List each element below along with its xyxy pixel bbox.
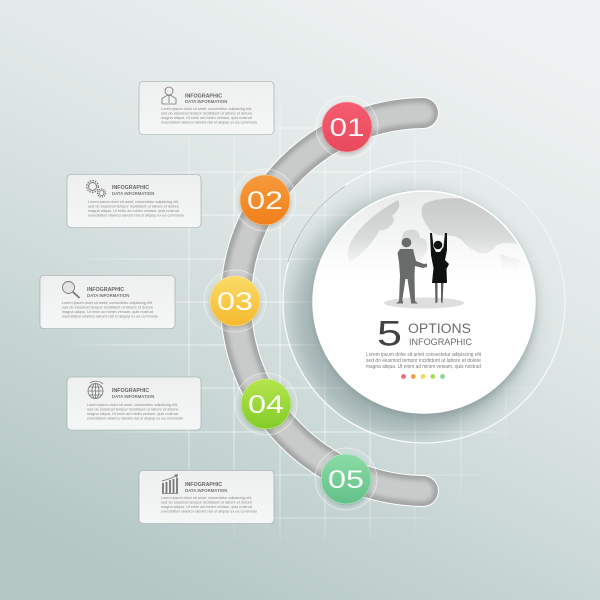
title: OPTIONS <box>408 321 471 336</box>
card 3 text: sed do eiusmod tempor incididunt ut labore et dolore <box>62 304 153 310</box>
card 2 text: magna aliqua. Ut enim ad minim veniam, quis nostrud <box>88 208 179 213</box>
title <box>377 314 472 354</box>
card 1 text: DATA INFORMATION <box>185 99 227 104</box>
card 4 text: magna aliqua. Ut enim ad minim veniam, quis nostrud <box>87 411 178 416</box>
card 5 text: INFOGRAPHIC <box>185 482 222 488</box>
icon: growth chart <box>162 474 178 494</box>
central disc <box>313 191 535 417</box>
panel: card 2 <box>67 174 201 228</box>
card 4 text: INFOGRAPHIC <box>112 388 149 394</box>
badge 04: 04 <box>248 391 284 419</box>
world map <box>348 198 520 262</box>
panel: card 4 <box>67 377 201 430</box>
card 2 text: DATA INFORMATION <box>112 191 154 196</box>
card 3 text <box>62 287 158 318</box>
ground shadow <box>384 298 464 308</box>
badge 02 <box>234 169 296 231</box>
body text: Lorem ipsum dolor sit amet consectetur adipiscing elit <box>366 352 482 358</box>
card 5 text: DATA INFORMATION <box>185 488 227 493</box>
card 4 text: Lorem ipsum dolor sit amet, consectetur adipiscing elit, <box>87 402 178 407</box>
panel: card 5 <box>139 470 274 524</box>
card 1 text <box>161 94 257 124</box>
card 2 text <box>88 185 184 218</box>
icon: magnifier <box>62 282 80 298</box>
badge 04 <box>235 373 297 435</box>
curved track <box>236 113 423 491</box>
card 3 text: exercitation ullamco laboris nisi ut aliquip ex ea commodo <box>62 314 158 318</box>
card 1 text: Lorem ipsum dolor sit amet, consectetur adipiscing elit, <box>161 106 252 111</box>
title: 5 <box>377 314 402 354</box>
body text: magna aliqua. Ut enim ad minim veniam, quis nostrud <box>366 364 481 370</box>
card 5 text <box>161 482 257 514</box>
card 5 text: magna aliqua. Ut enim ad minim veniam, quis nostrud <box>161 504 252 509</box>
card 5 text: sed do eiusmod tempor incididunt ut labore et dolore <box>161 500 252 504</box>
badge 01 <box>316 96 378 158</box>
card 4 text <box>87 388 183 420</box>
card 1 text: exercitation ullamco laboris nisi ut aliquip ex ea commodo <box>161 120 257 124</box>
card 4 text: sed do eiusmod tempor incididunt ut labore et dolore <box>87 406 178 412</box>
icon: globe <box>88 381 103 398</box>
man silhouette <box>396 238 427 304</box>
card 3 text: INFOGRAPHIC <box>87 287 124 293</box>
body text: sed do eiusmod tempor incididunt ut labore et dolore <box>366 358 481 364</box>
panel: card 3 <box>40 276 175 328</box>
card 2 text: INFOGRAPHIC <box>112 185 149 191</box>
card 4 text: DATA INFORMATION <box>112 394 154 399</box>
badge 01: 01 <box>330 114 364 142</box>
color dots <box>401 374 445 379</box>
badge 05 <box>315 448 377 510</box>
card 1 text: INFOGRAPHIC <box>185 94 222 100</box>
badge 02: 02 <box>247 187 283 215</box>
people <box>384 233 464 308</box>
card 3 text: magna aliqua. Ut enim ad minim veniam, quis nostrud <box>62 309 153 314</box>
card 5 text: exercitation ullamco laboris nisi ut aliquip ex ea commodo <box>161 508 257 514</box>
title: INFOGRAPHIC <box>409 337 472 348</box>
card 1 text: magna aliqua. Ut enim ad minim veniam, quis nostrud <box>161 115 252 120</box>
body text <box>366 352 482 370</box>
icon: gears <box>87 181 106 197</box>
badge 03 <box>204 270 266 332</box>
card 4 text: exercitation ullamco laboris nisi ut aliquip ex ea commodo <box>87 416 183 420</box>
panel: card 1 <box>139 82 274 134</box>
badge 03: 03 <box>217 288 253 316</box>
glass ring around central disc <box>283 161 565 443</box>
card 2 text: Lorem ipsum dolor sit amet, consectetur adipiscing elit, <box>88 199 179 204</box>
badge 05: 05 <box>328 466 364 494</box>
card 1 text: sed do eiusmod tempor incididunt ut labore et dolore <box>161 110 252 116</box>
woman silhouette <box>430 233 449 304</box>
card 3 text: Lorem ipsum dolor sit amet, consectetur adipiscing elit, <box>62 300 153 305</box>
card 2 text: exercitation ullamco laboris nisi ut aliquip ex ea commodo <box>88 212 184 218</box>
icon: person <box>162 87 176 104</box>
card 2 text: sed do eiusmod tempor incididunt ut labore et dolore <box>88 204 179 208</box>
card 3 text: DATA INFORMATION <box>87 293 129 298</box>
card 5 text: Lorem ipsum dolor sit amet, consectetur adipiscing elit, <box>161 495 252 500</box>
